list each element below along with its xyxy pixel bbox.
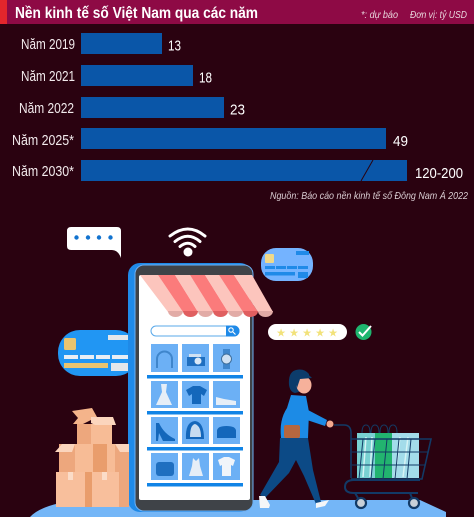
product icons: [156, 349, 236, 476]
rating pill: ★: [328, 328, 338, 340]
icon: camera: [187, 354, 205, 366]
bar chart: [12, 33, 463, 182]
rating pill: ★: [315, 328, 325, 340]
hair and face: [289, 370, 309, 393]
top box: [77, 424, 112, 444]
rating pill: [268, 324, 347, 340]
icon: cap: [186, 421, 204, 439]
row 2022: 23: [230, 102, 245, 118]
middle row boxes: [59, 444, 75, 472]
icon: high heel: [156, 423, 175, 441]
row 2019: Năm 2019: [21, 37, 75, 53]
row 2025: Năm 2025*: [12, 133, 74, 149]
shelf lines: [147, 375, 243, 486]
bottom boxes: [56, 472, 85, 507]
row 2019: 13: [168, 38, 181, 54]
row 2025: [12, 128, 408, 150]
row 2030: [12, 160, 463, 182]
box flaps: [72, 408, 97, 424]
forecast note: *: dự báo: [361, 10, 398, 21]
shoes: [259, 496, 270, 508]
row 2022: [19, 97, 245, 118]
torso: [281, 395, 309, 438]
icon: clutch: [156, 462, 174, 476]
phone screen: [139, 275, 250, 500]
title: Nền kinh tế số Việt Nam qua các năm: [15, 5, 258, 22]
icon: bag: [217, 426, 236, 438]
row 2030: Năm 2030*: [12, 164, 74, 180]
icon: chat bubble: [67, 227, 121, 258]
row 2021: Năm 2021: [21, 69, 75, 85]
row 2021: [21, 65, 212, 86]
icon: top: [189, 458, 203, 476]
search bar: [151, 326, 240, 336]
header band: [0, 0, 474, 24]
woman shopper: [259, 370, 431, 508]
icon: credit card right: [261, 248, 313, 281]
icon: shirt: [218, 457, 235, 476]
icon: wifi: [170, 229, 205, 256]
icon: t-shirt: [186, 386, 207, 404]
hand: [326, 420, 334, 428]
rating pill: ★: [276, 328, 286, 340]
arm: [296, 396, 327, 426]
product tiles: [151, 344, 240, 480]
icon: check mark: [356, 324, 372, 340]
icon: watch: [222, 349, 232, 369]
shopping cart: [334, 425, 431, 508]
phone: [128, 263, 273, 512]
ground platform: [30, 500, 446, 517]
handbag: [284, 425, 300, 438]
rating pill: ★: [302, 328, 312, 340]
icon: sneaker: [216, 397, 236, 405]
icon: dress: [156, 384, 172, 405]
icon: credit card left: [58, 330, 138, 376]
row 2030: 120-200: [415, 165, 463, 182]
row 2019: [21, 33, 181, 54]
phone body: [128, 263, 252, 512]
row 2022: Năm 2022: [19, 101, 74, 117]
row 2021: 18: [199, 70, 212, 86]
row 2025: 49: [393, 133, 408, 150]
rating pill: ★: [289, 328, 299, 340]
icon: headphones: [157, 352, 172, 368]
awning: [140, 275, 273, 317]
stack of boxes: [55, 408, 129, 507]
shopping bags: [357, 425, 419, 478]
legs: [260, 438, 321, 504]
